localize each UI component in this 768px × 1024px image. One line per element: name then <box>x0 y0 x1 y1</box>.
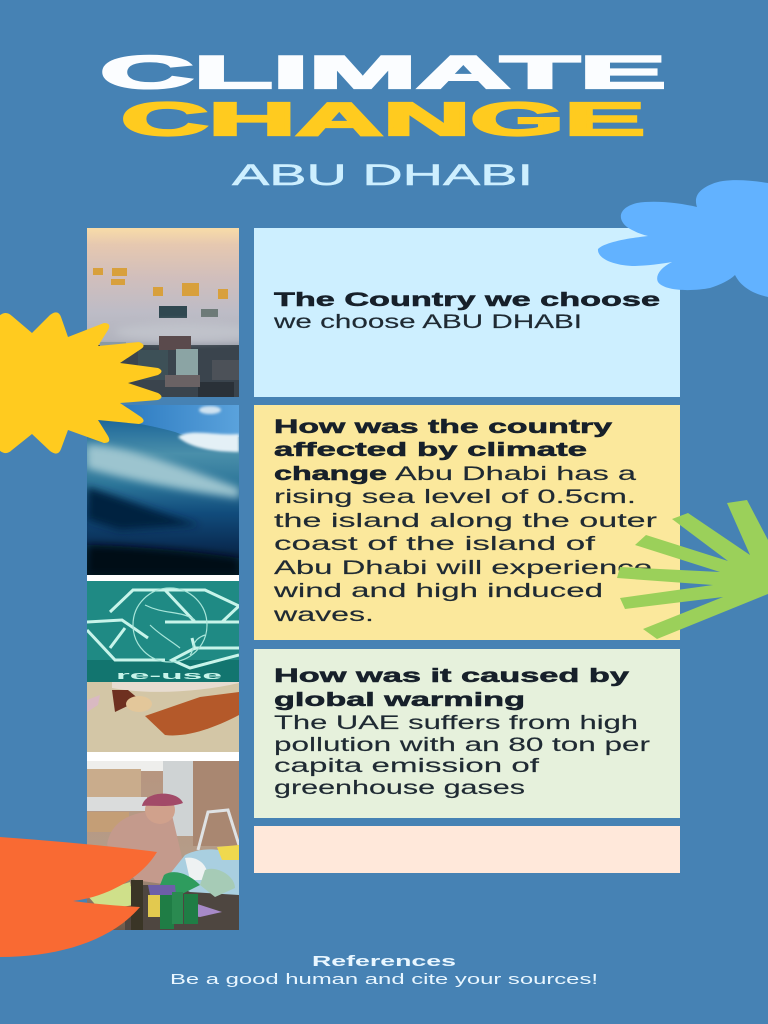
photo: leaf on fabric <box>87 682 239 752</box>
text: caused body <box>274 712 651 799</box>
text: affected body: coast of the island of <box>274 533 596 555</box>
icon: blue flower <box>598 180 768 297</box>
icon: orange shape <box>0 837 157 957</box>
heading: caused: How was it caused by <box>274 665 629 687</box>
panel: the country we choose <box>254 228 680 397</box>
text: affected body: Abu Dhabi has a <box>395 463 636 485</box>
text: affected body: rising sea level of 0.5cm. <box>274 486 636 508</box>
text: caused body: The UAE suffers from high <box>274 712 638 734</box>
text: caused body: capita emission of <box>274 755 540 777</box>
text: caused body: pollution with an 80 ton per <box>274 734 651 756</box>
heading: caused: global warming <box>274 689 525 711</box>
title: change: CHANGE <box>121 93 645 145</box>
icon: green rays <box>617 500 768 639</box>
photo: re-use bag <box>87 581 239 682</box>
heading: country: The Country we choose <box>274 289 660 311</box>
title: climate: CLIMATE <box>100 46 666 98</box>
photo: ocean wave <box>87 405 239 575</box>
references <box>170 953 598 988</box>
text: affected body <box>272 463 658 626</box>
heading: caused <box>274 665 629 711</box>
text: affected body: waves. <box>272 604 374 626</box>
text: caused body: greenhouse gases <box>274 777 525 799</box>
panel: how the country was affected <box>254 405 680 640</box>
photo: city above fog <box>87 228 255 397</box>
panel: empty peach box <box>254 826 680 873</box>
title <box>100 46 666 192</box>
panel: how it was caused <box>254 649 680 818</box>
text: affected body: wind and high induced <box>272 580 603 602</box>
white strip <box>87 752 239 761</box>
text: affected body: Abu Dhabi will experience <box>274 557 652 579</box>
white strip <box>87 575 239 581</box>
icon: yellow splat <box>0 312 162 454</box>
heading: affected <box>274 416 612 485</box>
subtitle: ABU DHABI <box>232 159 533 192</box>
text: references note: Be a good human and cite your sources! <box>170 971 598 988</box>
heading: affected: How was the country <box>274 416 612 438</box>
photo: person sorting plastics <box>87 761 239 930</box>
text: affected body: the island along the outer <box>274 510 658 532</box>
heading: affected: affected by climate <box>274 439 587 461</box>
text: country body: we choose ABU DHABI <box>272 311 582 333</box>
heading: affected: change <box>274 463 387 485</box>
heading: references: References <box>312 953 456 970</box>
photo: re-use bag: re-use <box>116 670 222 682</box>
